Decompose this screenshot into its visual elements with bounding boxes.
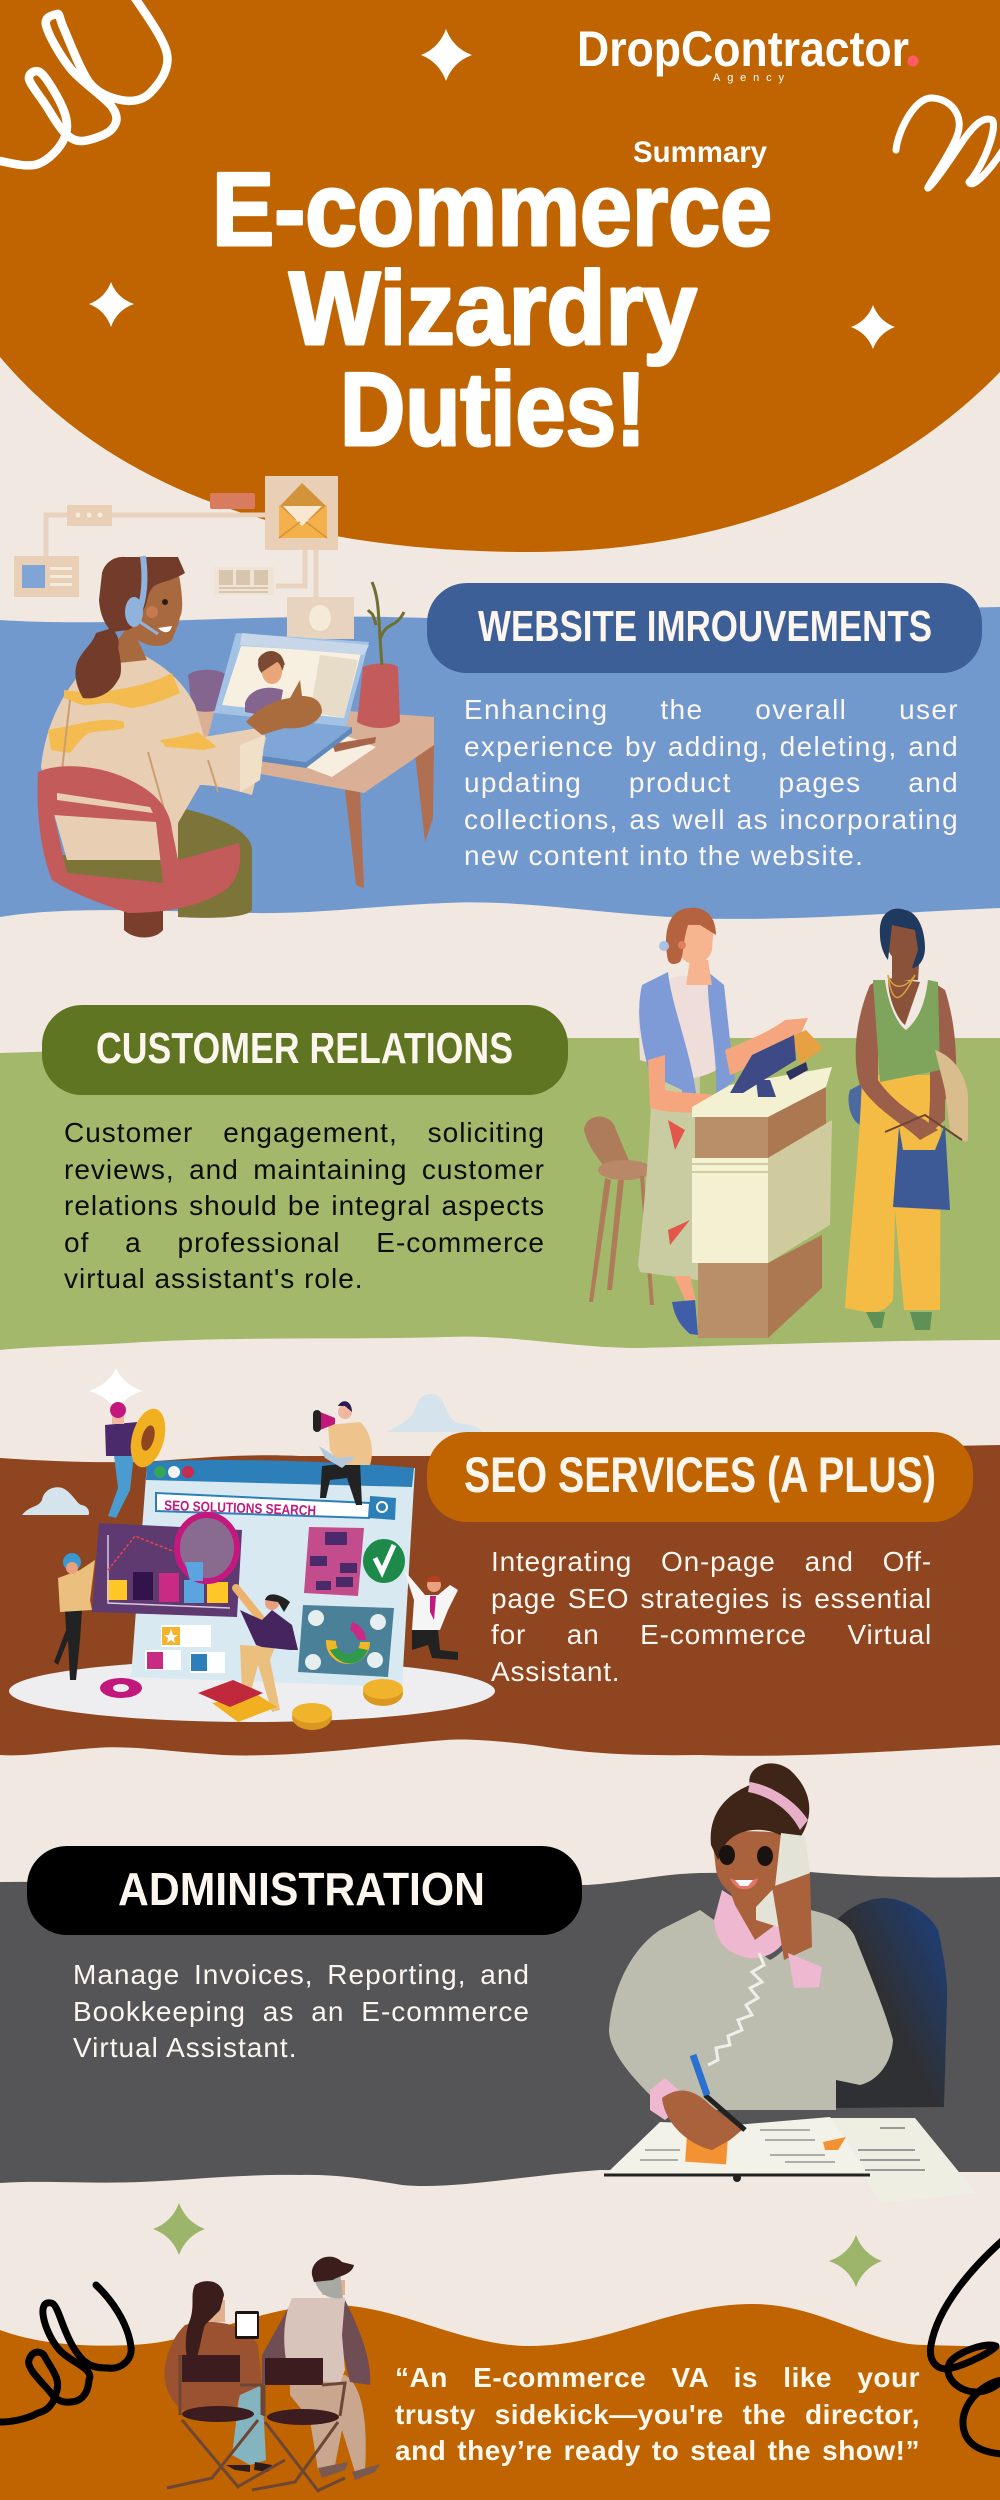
text: website improvements description: collections, as well as incorporating: [464, 804, 959, 835]
network icons: [14, 476, 354, 639]
text: customer relations description: virtual assistant's role.: [64, 1263, 364, 1294]
sparkle: right: [851, 305, 895, 349]
quote: “An E-commerce VA is like your: [395, 2362, 920, 2393]
white sparkle: [89, 1368, 142, 1412]
browser window: [131, 1460, 415, 1687]
pill: website improvements: [427, 583, 982, 673]
raised arm: [772, 1873, 812, 1960]
text: website improvements description: experience by adding, deleting, and: [464, 731, 959, 762]
header shape: [0, 0, 1000, 552]
squiggle: footer left: [0, 2285, 131, 2422]
check badge: [363, 1539, 405, 1583]
text: website improvements description: Enhancing the overall user: [464, 694, 959, 725]
title: Duties!: [340, 352, 646, 468]
pill: customer relations: [42, 1005, 568, 1095]
text: customer relations description: reviews, and maintaining customer: [64, 1154, 545, 1185]
hand: [246, 680, 322, 735]
logo: DropContractor: [577, 21, 909, 77]
text: website improvements description: updating product pages and: [464, 767, 959, 798]
illustration: seo search window: [9, 1368, 495, 1730]
quote: [395, 2362, 920, 2466]
quote: and they’re ready to steal the show!”: [395, 2435, 920, 2466]
tiles, gear and coins: [100, 1678, 403, 1730]
person with megaphone: [313, 1401, 372, 1505]
illustration: woman on phone with notebook: [604, 1763, 976, 2203]
hair: [711, 1763, 809, 1860]
text: administration description: Bookkeeping as an E-commerce: [73, 1996, 530, 2027]
band: footer background: [0, 2304, 1000, 2500]
writing hand: [650, 2055, 745, 2150]
woman neck: [726, 1880, 775, 1940]
right man: [404, 1570, 458, 1660]
sweater: [609, 1910, 893, 2110]
woman at counter: [638, 908, 808, 1335]
base ellipse: [9, 1660, 495, 1722]
person with gear: [105, 1402, 171, 1518]
man: [262, 2257, 380, 2480]
center girl: [240, 1594, 298, 1712]
sparkle: footer left: [153, 2203, 205, 2255]
illustration: customer service counter: [584, 908, 968, 1338]
face details: [719, 1845, 773, 1889]
sparkle: top: [421, 29, 472, 81]
text: seo services description: page SEO strategies is essential: [491, 1583, 932, 1614]
pill: administration: [27, 1846, 582, 1935]
left man: [54, 1553, 95, 1680]
woman: [164, 2281, 272, 2472]
title: E-commerce: [212, 152, 772, 268]
browser window: SEO SOLUTIONS SEARCH: [164, 1497, 316, 1518]
quote: trusty sidekick—you're the director,: [395, 2399, 920, 2430]
phone cord: [708, 1953, 764, 2065]
desk: [190, 700, 434, 888]
sweater: [41, 652, 266, 860]
band: customer relations background: [0, 1038, 1000, 1350]
squiggle: footer right: [930, 2240, 1000, 2454]
squiggle: top left: [0, 0, 167, 165]
vase and plant: [357, 582, 404, 728]
text: customer relations description: Customer engagement, soliciting: [64, 1117, 545, 1148]
chair: [38, 766, 240, 913]
text: customer relations description: [64, 1117, 545, 1294]
chair leg: [124, 905, 163, 938]
magnifier: [177, 1515, 281, 1644]
counter: [692, 1067, 832, 1338]
squiggle: top right: [896, 98, 1000, 188]
text: customer relations description: of a professional E-commerce: [64, 1227, 545, 1258]
phone: [756, 1833, 810, 1927]
title: [212, 152, 772, 468]
paper sheets: [830, 2118, 976, 2203]
text: administration description: [73, 1959, 530, 2063]
cup: [188, 670, 226, 712]
pill: customer relations: CUSTOMER RELATIONS: [96, 1024, 513, 1073]
text: seo services description: Assistant.: [491, 1656, 620, 1687]
text: website improvements description: new content into the website.: [464, 840, 864, 871]
pants: [60, 808, 252, 918]
monitor: [730, 1030, 823, 1097]
pill: administration: ADMINISTRATION: [118, 1863, 485, 1915]
collar: [714, 1890, 790, 1958]
sparkle: footer right: [829, 2235, 882, 2287]
text: administration description: Virtual Assistant.: [73, 2032, 297, 2063]
text: seo services description: for an E-commerce Virtual: [491, 1619, 932, 1650]
customer woman: [845, 909, 968, 1330]
text: administration description: Manage Invoices, Reporting, and: [73, 1959, 530, 1990]
teal donut panel: [298, 1605, 394, 1677]
text: seo services description: [491, 1546, 932, 1687]
clouds: [22, 1394, 482, 1515]
text: seo services description: Integrating On-page and Off-: [491, 1546, 932, 1577]
chart panel: [92, 1523, 242, 1617]
office chair: [835, 1898, 947, 2108]
band: administration background: [0, 1872, 1000, 2186]
laptop: [204, 633, 369, 768]
head: [712, 1831, 792, 1900]
logo: Agency: [713, 72, 784, 84]
cuff: [788, 1953, 822, 1988]
illustration: two people on director chairs: [164, 2257, 380, 2492]
small profile cards: [145, 1625, 225, 1673]
band: website improvements background: [0, 607, 1000, 919]
title: Wizardry: [289, 251, 697, 367]
text: website improvements description: [464, 694, 959, 871]
director chairs: [167, 2355, 345, 2492]
sparkle: left: [89, 282, 134, 327]
pink flow panel: [304, 1527, 364, 1596]
text: customer relations description: relations should be integral aspects: [64, 1190, 545, 1221]
head and headset: [75, 556, 185, 698]
band: seo services background: [0, 1445, 1000, 1756]
pill: seo services: [427, 1432, 973, 1522]
illustration: woman at laptop with network icons: [14, 476, 434, 938]
notebook: [604, 2117, 925, 2182]
stool: [584, 1116, 654, 1305]
subtitle: Summary: [633, 136, 767, 169]
